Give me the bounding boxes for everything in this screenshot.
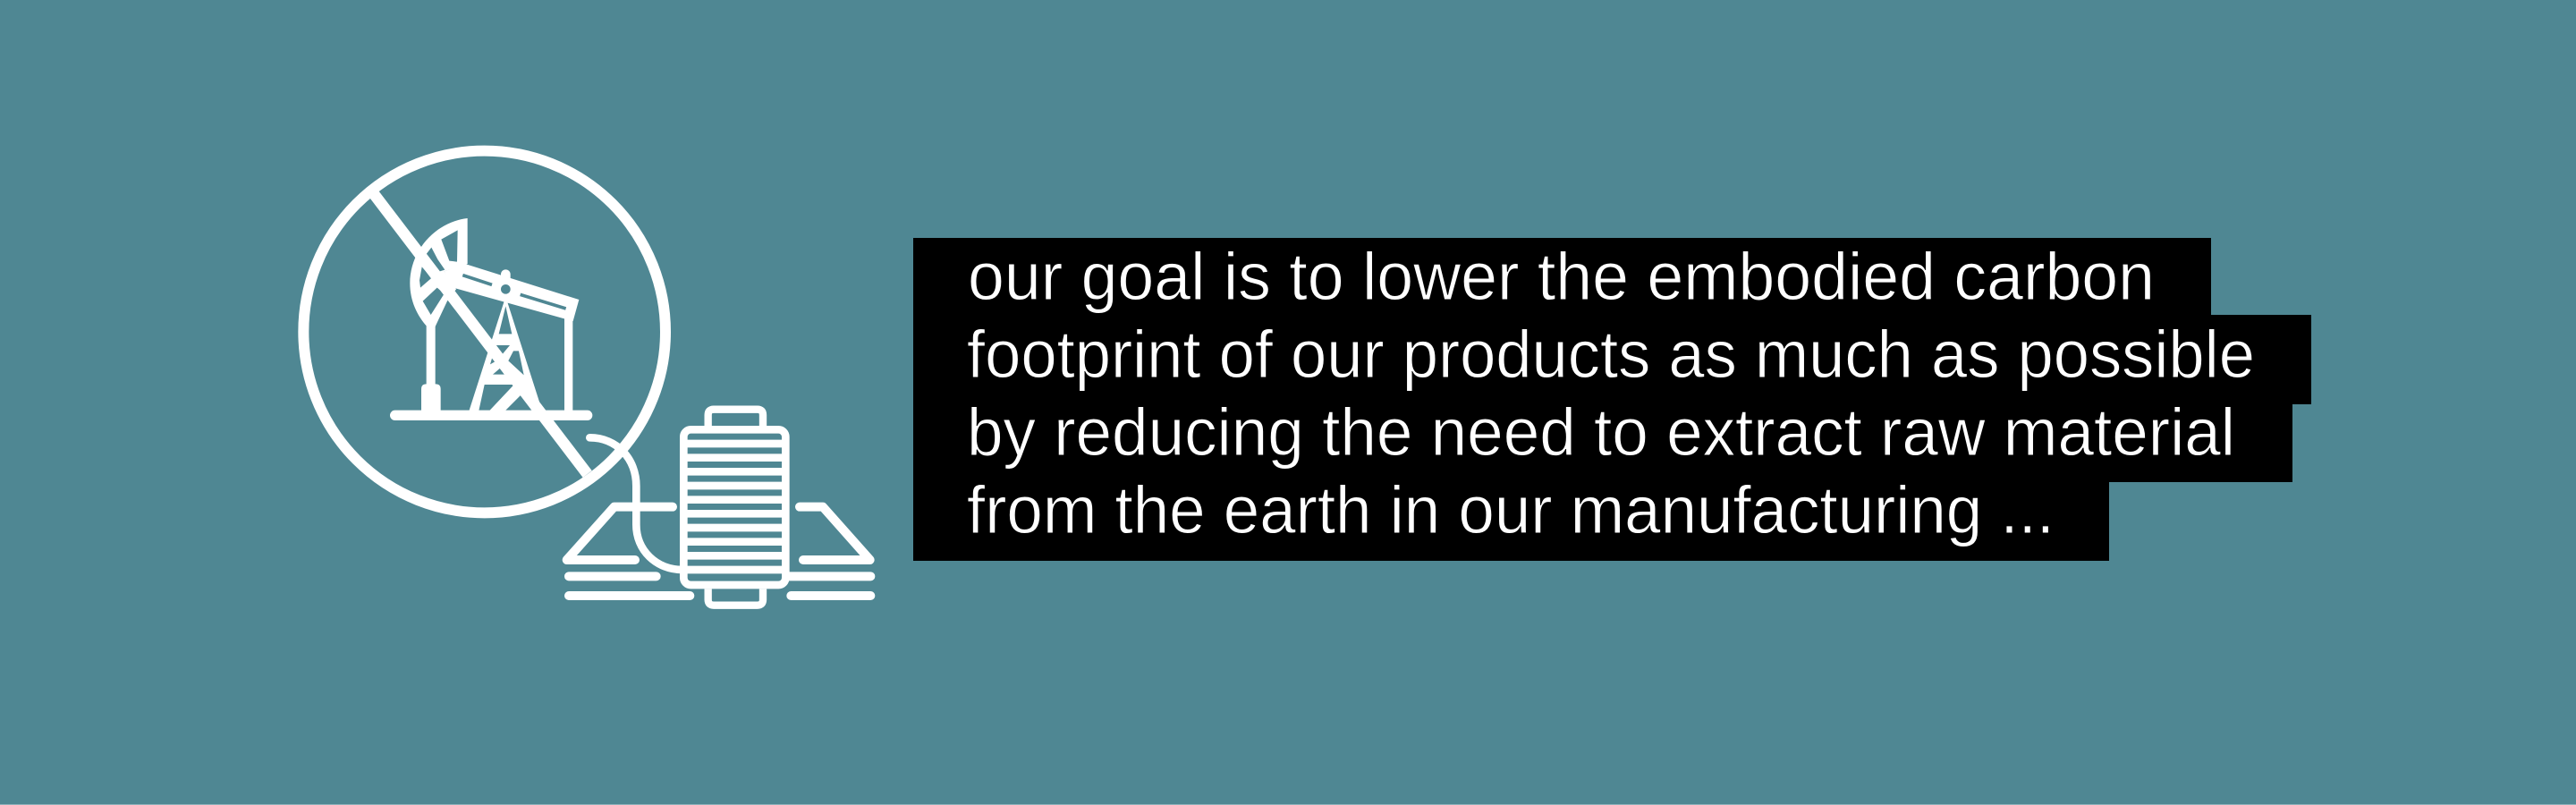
pump beam: [445, 264, 579, 321]
pump rod and counterweight: [421, 322, 441, 413]
spool body: [683, 429, 785, 585]
line 3: by reducing the need to extract raw material: [967, 394, 2235, 470]
pump well rod: [556, 316, 581, 413]
pump derrick tower: [469, 297, 543, 412]
spool caps: [708, 410, 763, 606]
fabric right: [787, 507, 870, 596]
line 4: from the earth in our manufacturing ...: [967, 472, 2055, 547]
icon: thread spool and fabric: [567, 410, 870, 606]
fabric left: [567, 507, 690, 596]
prohibition slash: [374, 194, 588, 474]
thread strand: [589, 437, 682, 570]
icon: no oil extraction pump: [303, 151, 665, 513]
prohibition circle: [303, 151, 665, 513]
ground line: [395, 400, 588, 430]
pump pivot hub: [496, 275, 516, 300]
line 1: our goal is to lower the embodied carbon: [968, 239, 2155, 314]
text block: goal statement: [967, 239, 2255, 547]
pump horsehead: [410, 218, 468, 326]
panel: black highlighted text background: [913, 238, 2311, 561]
line 2: footprint of our products as much as possible: [967, 317, 2255, 392]
